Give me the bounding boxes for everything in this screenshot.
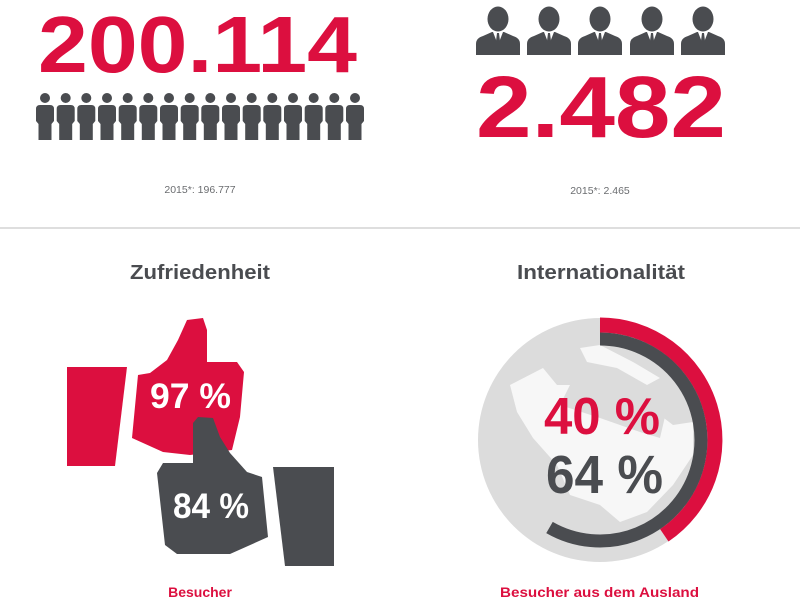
icon: red thumb up <box>67 318 244 466</box>
panel: visitors <box>36 0 364 196</box>
ring: dark 64 percent arc <box>550 339 701 541</box>
ring: red 40 percent arc <box>600 325 715 535</box>
value: 84 %: 84 % <box>173 487 249 526</box>
value: 64 %: 64 % <box>546 445 663 505</box>
label: Besucher aus dem Ausland: Besucher aus dem Ausland <box>500 584 699 600</box>
icon row: 5 businessmen <box>476 6 725 55</box>
value: 97 %: 97 % <box>150 377 231 416</box>
heading: Internationalität: Internationalität <box>517 262 685 284</box>
number: 2.482: 2.482 <box>476 59 726 156</box>
panel: satisfaction <box>67 262 334 600</box>
icon: globe <box>478 318 722 562</box>
heading: Zufriedenheit: Zufriedenheit <box>130 262 270 284</box>
value: 40 %: 40 % <box>544 388 660 446</box>
comparison text: exhibitors 2015: 2015*: 2.465 <box>570 185 630 197</box>
number: 200.114: 200.114 <box>38 0 358 89</box>
panel: exhibitors <box>476 6 726 197</box>
comparison text: visitors 2015: 2015*: 196.777 <box>164 184 236 196</box>
icon: dark thumb <box>157 417 334 566</box>
icon row: 16 persons <box>36 93 364 140</box>
panel: internationality <box>478 262 722 600</box>
label: Besucher: Besucher <box>168 584 232 600</box>
